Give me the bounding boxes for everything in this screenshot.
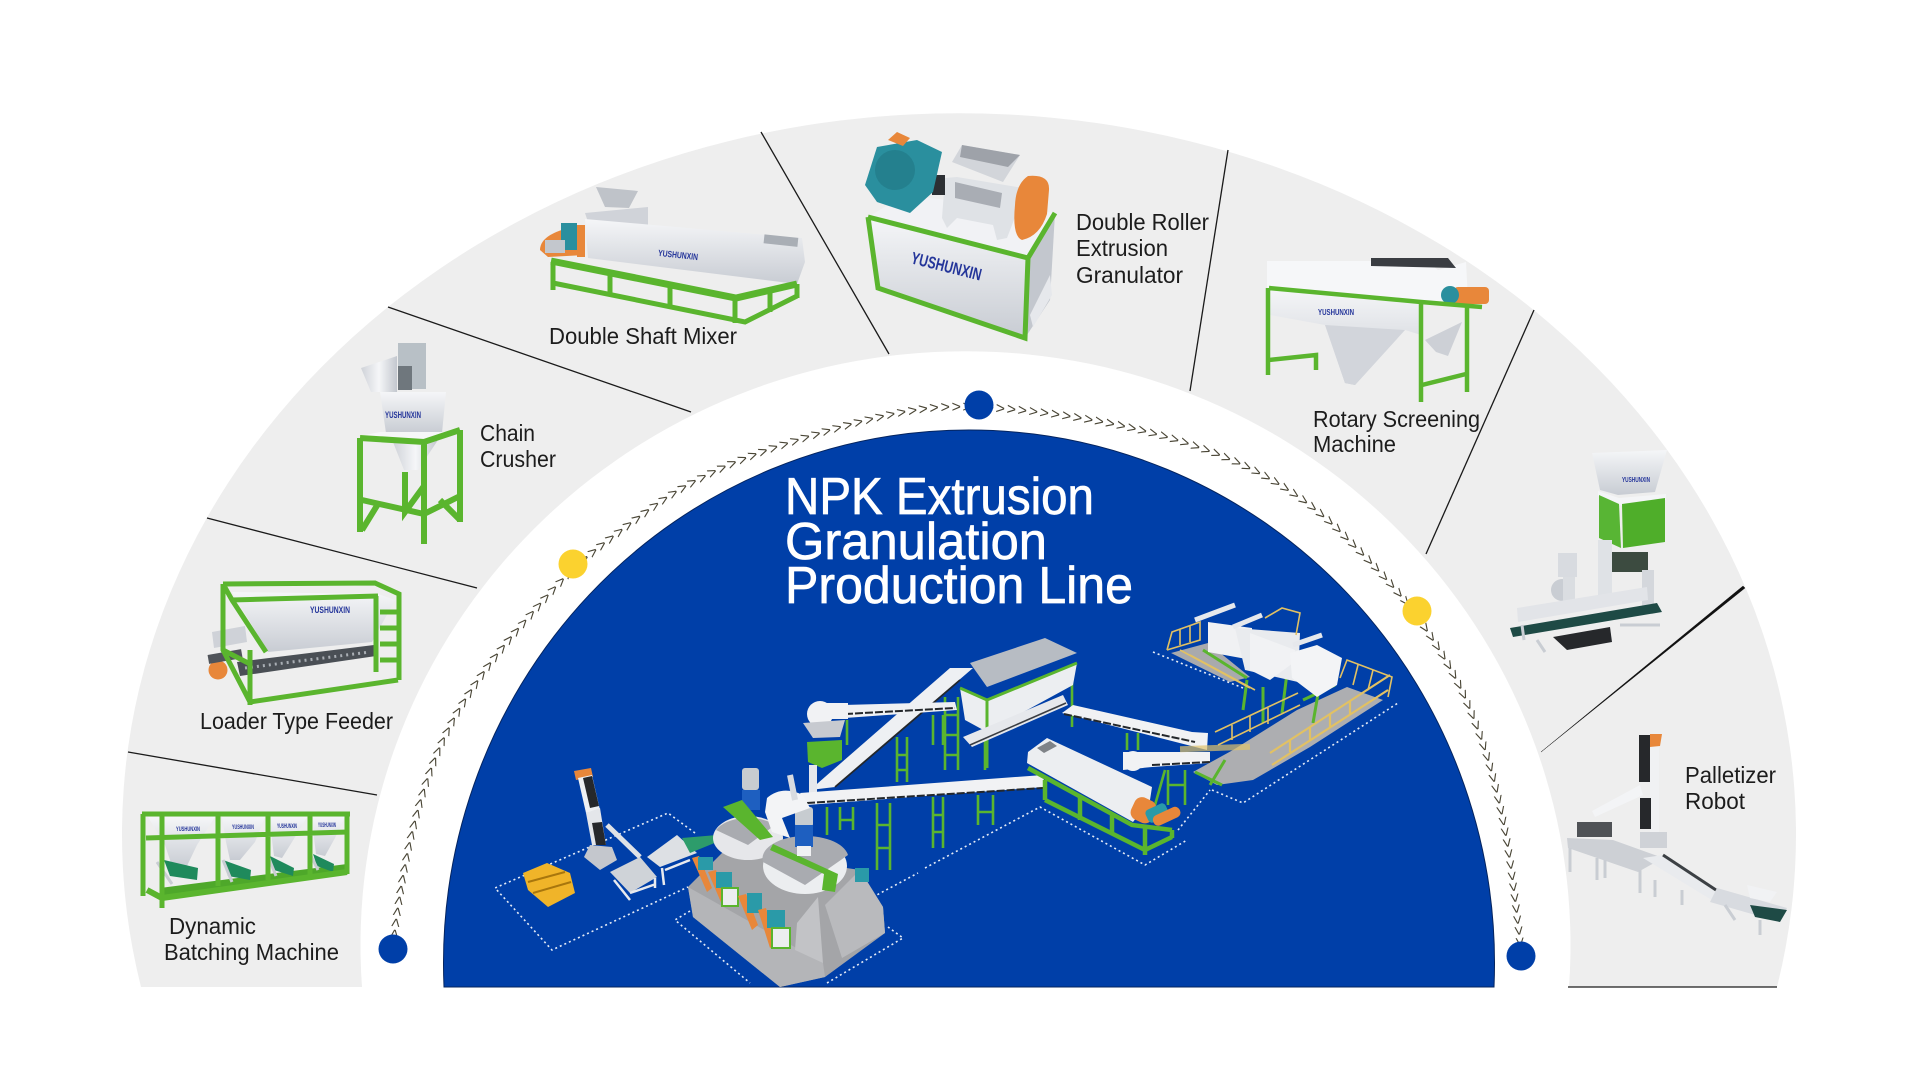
machine: chain crusher: YUSHUNXIN: [385, 410, 421, 420]
machine: loader type feeder: [208, 583, 399, 705]
process flow chevron arc: >>>>>>>>>>>>>>>>>>>>>>>>>>>>>>>>>>>>>>>>>>>>>>>>>>>>>>>>>>>>>>>>>>>>>>>>>>>>>>>>>>>>>>>>>>>>>>>>>>>>>>>>>>>>>>>>>>>>>>>>>>>>>>>>>>>>>>>>>>>>>>>>>>>>>>>>>>>>>>>: [391, 402, 1524, 942]
machine: double shaft mixer: [540, 187, 805, 323]
label: palletizer robot: [1685, 762, 1776, 814]
label: palletizer robot: Robot: [1685, 788, 1746, 814]
flow dot: yellow right: [1402, 596, 1432, 626]
label: dynamic batching machine: Batching Machine: [164, 939, 339, 965]
machine: dynamic batching machine: [142, 814, 350, 908]
flow dot: yellow left: [558, 550, 588, 578]
machine: dynamic batching machine: YUSHUNXIN: [176, 827, 200, 833]
machine: rotary screening machine: [1267, 258, 1489, 402]
label: double roller extrusion granulator: [1076, 209, 1209, 288]
flow dot: top: [964, 390, 994, 420]
label: dynamic batching machine: [164, 913, 339, 965]
machine: automatic bagging machine: YUSHUNXIN: [1622, 477, 1650, 484]
machine: palletizer robot: [1567, 734, 1787, 935]
title: Production Line: [785, 557, 1133, 615]
title: NPK Extrusion: [785, 468, 1094, 526]
label: palletizer robot: Palletizer: [1685, 762, 1776, 788]
panel: grey machine ring: [122, 113, 1796, 987]
title: [785, 468, 1133, 615]
machine: automatic bagging machine: [1510, 450, 1667, 652]
label: chain crusher: [480, 420, 556, 472]
machine: loader type feeder: YUSHUNXIN: [310, 605, 350, 615]
machine: rotary screening machine: YUSHUNXIN: [1318, 308, 1354, 317]
label: rotary screening machine: Rotary Screening: [1313, 406, 1480, 432]
flow dot: end: [1506, 942, 1536, 970]
production line overview illustration: [495, 605, 1398, 987]
label: chain crusher: Chain: [480, 420, 535, 446]
machine: double shaft mixer: YUSHUNXIN: [658, 248, 699, 262]
label: rotary screening machine: [1313, 406, 1480, 457]
label: chain crusher: Crusher: [480, 446, 556, 472]
label: double roller extrusion granulator: Double Roller: [1076, 209, 1209, 235]
machine: double roller extrusion granulator: [865, 132, 1055, 338]
label: rotary screening machine: Machine: [1313, 431, 1396, 457]
process flow chevron arc: [391, 402, 1524, 942]
label: dynamic batching machine: Dynamic: [169, 913, 256, 939]
machine: dynamic batching machine: YUSHUNXIN: [232, 825, 254, 831]
label: double roller extrusion granulator: Granulator: [1076, 262, 1183, 288]
machine: double roller extrusion granulator: YUSHUNXIN: [909, 249, 984, 284]
machine: chain crusher: [360, 343, 462, 544]
title: Granulation: [785, 513, 1047, 571]
label: double roller extrusion granulator: Extrusion: [1076, 235, 1168, 261]
panel: blue central dome: [443, 430, 1494, 987]
machine: dynamic batching machine: YUSHUNXIN: [318, 823, 336, 829]
flow dot: start: [378, 934, 408, 964]
label: double shaft mixer: Double Shaft Mixer: [549, 323, 737, 349]
machine: dynamic batching machine: YUSHUNXIN: [277, 824, 297, 830]
label: loader type feeder: Loader Type Feeder: [200, 708, 393, 734]
